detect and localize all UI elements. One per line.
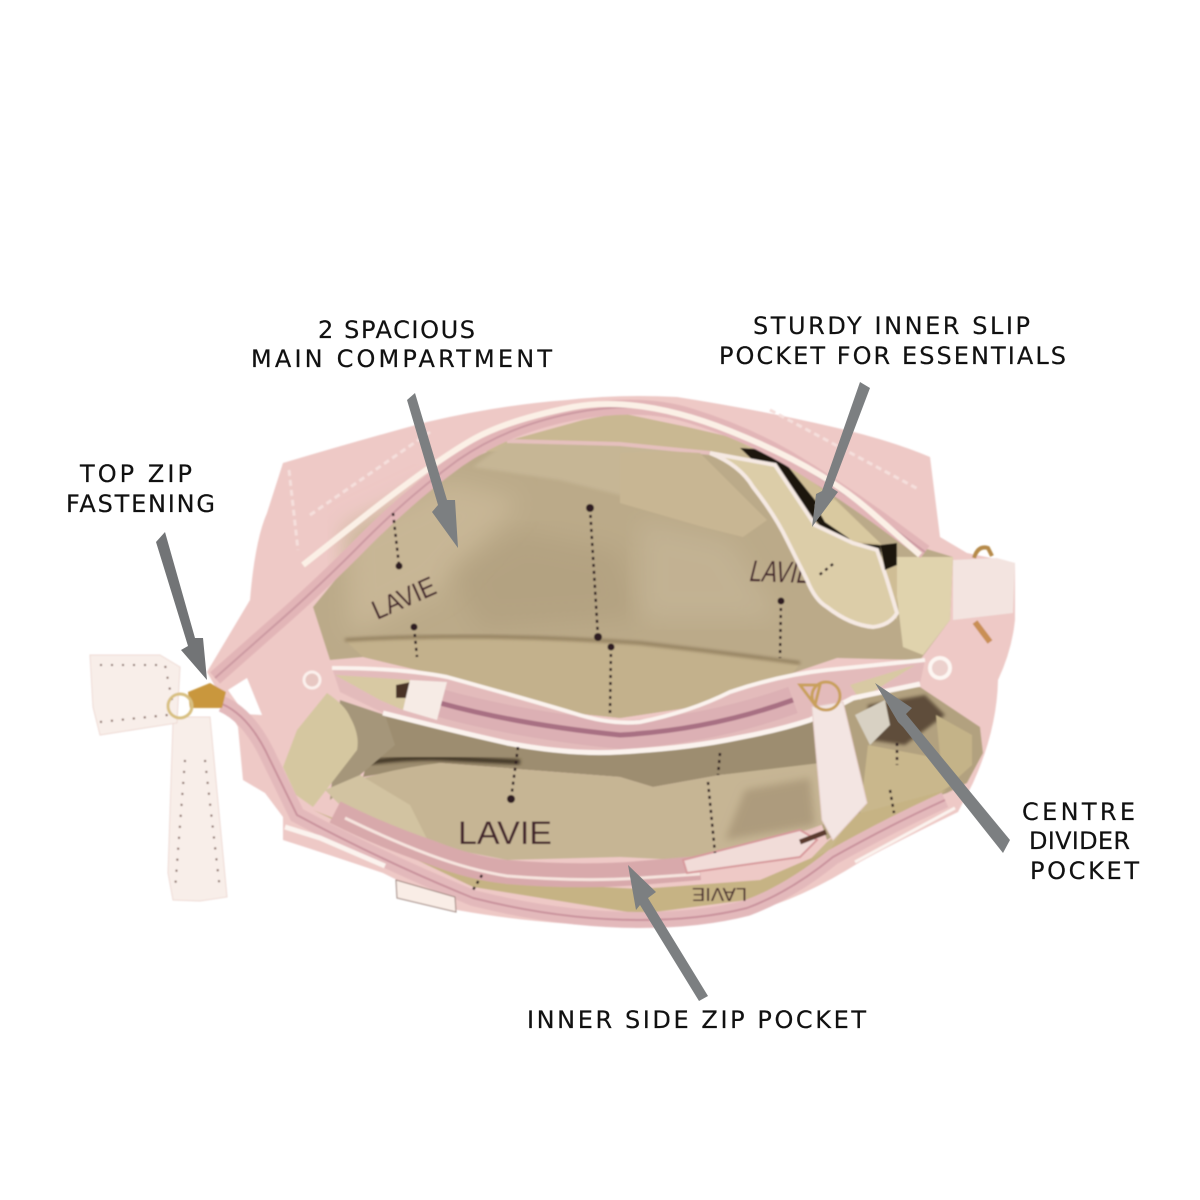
- top stitch details: [289, 410, 920, 550]
- right strap tab: [953, 547, 1015, 642]
- left lining pillow: [283, 693, 358, 807]
- slip pocket cream fold: [815, 500, 880, 543]
- left ring: [304, 672, 320, 688]
- label: slip pocket: STURDY INNER SLIP: [753, 312, 1030, 340]
- label: side zip: INNER SIDE ZIP POCKET: [527, 1006, 866, 1034]
- lining light patch: [345, 480, 520, 635]
- centre divider band: [332, 660, 925, 753]
- back pocket lower panel: [473, 442, 700, 500]
- LAVIE logos: [367, 555, 816, 625]
- label: top zip: [66, 460, 215, 518]
- label: centre divider: CENTRE: [1022, 798, 1135, 826]
- lower logo: LAVIE: [458, 815, 552, 851]
- LAVIE logos: LAVIE: [367, 571, 441, 625]
- zip fob: [90, 655, 227, 901]
- right cream panel: [897, 557, 953, 655]
- divider top rim: [332, 660, 925, 723]
- divider zip teeth: [440, 700, 793, 735]
- lower white rim: [285, 827, 385, 866]
- bottom tab: [396, 880, 456, 912]
- arrow: side zip: [628, 865, 708, 1001]
- label: centre divider: POCKET: [1030, 857, 1139, 885]
- right ring: [930, 658, 950, 678]
- divider buckle: [800, 682, 840, 710]
- top zip band: [215, 407, 925, 678]
- dark corner: [880, 543, 897, 570]
- top zip stripe: [215, 407, 925, 678]
- label: top zip: FASTENING: [66, 490, 215, 518]
- divider right opening: [850, 665, 915, 700]
- label: slip pocket: [719, 312, 1066, 370]
- inner slip pocket: [710, 453, 897, 627]
- label: main compartment: 2 SPACIOUS: [318, 316, 475, 344]
- folded lining pillow: [620, 452, 767, 537]
- inverted logo: LAVIE: [692, 884, 747, 904]
- back pocket: [480, 413, 770, 462]
- label: slip pocket: POCKET FOR ESSENTIALS: [719, 342, 1066, 370]
- right lower fold: [790, 745, 950, 880]
- divider opening shade: [396, 682, 411, 698]
- arrow: centre divider: [875, 683, 1010, 853]
- lower shelf of upper compartment: [345, 637, 800, 718]
- lower zip stripe: [222, 704, 945, 920]
- divider zip stripe: [440, 700, 793, 735]
- lining right shaded patch: [640, 520, 780, 620]
- label: main compartment: MAIN COMPARTMENT: [251, 345, 552, 373]
- lining dark patch: [450, 530, 640, 630]
- label: centre divider: DIVIDER: [1029, 827, 1130, 855]
- lower zip band: [222, 704, 945, 920]
- slip pocket back wall: [743, 443, 897, 620]
- lower compartment dark seam: [350, 758, 520, 765]
- white notch by zip: [228, 678, 262, 715]
- lining under lower band: [313, 790, 947, 914]
- small buckle: [800, 832, 826, 842]
- lining dotted lines: [393, 504, 897, 890]
- lower compartment back wall: [363, 715, 820, 787]
- right pocket interior: [800, 687, 983, 840]
- right pocket dark patch: [868, 695, 945, 745]
- bag illustration: [90, 396, 1015, 927]
- left divider tab: [403, 680, 447, 720]
- lower lining dark patch: [725, 778, 815, 840]
- crease shadow: [345, 637, 800, 663]
- label: centre divider: [1022, 798, 1139, 885]
- label: main compartment: [251, 316, 552, 373]
- lower inner band stripe: [345, 818, 700, 880]
- arrow: top zip: [156, 532, 207, 680]
- divider bottom rim: [383, 684, 920, 753]
- bag outer body: [207, 396, 1015, 927]
- LAVIE logos: LAVIE: [746, 555, 816, 590]
- arrow: main compartment: [407, 393, 458, 548]
- lower main lining: [350, 763, 827, 860]
- left shaded lining: [330, 700, 395, 800]
- slip pocket dark gap: [740, 448, 885, 590]
- right pocket light panel: [936, 715, 972, 785]
- top white rim: [303, 404, 920, 565]
- divider strap: [812, 702, 867, 840]
- divider opening: [335, 675, 410, 710]
- lower left lining wedge: [325, 775, 430, 845]
- upper compartment lining: [313, 413, 953, 718]
- arrow: slip pocket: [812, 382, 870, 527]
- lower strap: [683, 830, 817, 873]
- divider logo patch: [855, 700, 890, 745]
- back pocket rim: [507, 441, 710, 453]
- lower inner band: [335, 812, 700, 875]
- lower right white rim: [855, 808, 955, 862]
- label: top zip: TOP ZIP: [79, 460, 192, 488]
